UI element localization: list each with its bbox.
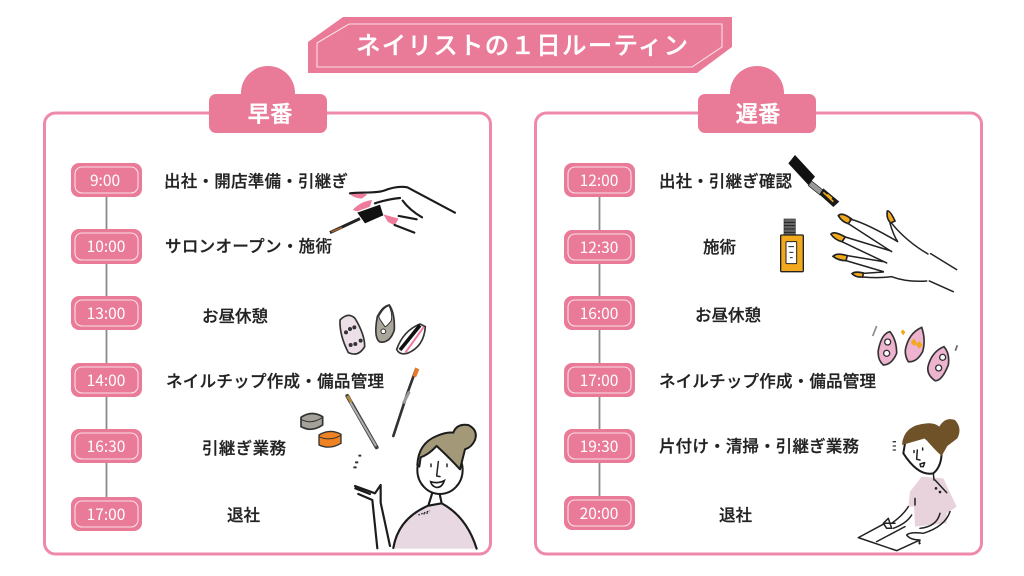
tab: early shift [209, 66, 327, 133]
time 12:30: 12:30 [580, 236, 618, 258]
illustration: woman with bun [355, 425, 477, 549]
timeline: late shift [564, 163, 635, 530]
time 16:00: 16:00 [580, 302, 618, 324]
icon: star nail tips [873, 326, 957, 381]
task labels: late shift: ネイルチップ作成・備品管理 [659, 368, 876, 392]
time 16:00 [564, 296, 635, 330]
illustration: woman writing [858, 419, 960, 551]
task labels: late shift: 退社 [719, 502, 752, 526]
icon: decorated nail tips [340, 305, 425, 354]
task labels: early shift: 出社・開店準備・引継ぎ [164, 168, 348, 192]
time 20:00: 20:00 [580, 502, 618, 524]
time 17:00 [71, 497, 142, 531]
time 16:30: 16:30 [87, 435, 125, 457]
time 14:00 [71, 363, 142, 397]
title banner [308, 17, 732, 73]
time 19:30 [564, 429, 635, 463]
time 17:00 [564, 363, 635, 397]
tab: early shift: 早番 [247, 97, 293, 129]
icon: gel jars [301, 413, 341, 447]
icon: hand holding pink polish brush [330, 187, 455, 233]
icon: yellow polish bottle [781, 219, 803, 272]
task labels: early shift: 引継ぎ業務 [202, 435, 286, 459]
time 12:00: 12:00 [580, 169, 618, 191]
title banner: ネイリストの１日ルーティン [356, 27, 688, 62]
time 16:30 [71, 429, 142, 463]
icon: hand with yellow nails [831, 211, 957, 292]
task labels: early shift: 退社 [227, 502, 260, 526]
task labels: late shift: 片付け・清掃・引継ぎ業務 [659, 433, 860, 457]
time 9:00: 9:00 [90, 169, 120, 191]
task labels: late shift: 施術 [703, 234, 736, 258]
task labels: early shift [164, 168, 384, 526]
time 12:00 [564, 163, 635, 197]
icon: nail brushes [347, 367, 419, 447]
icon: black polish brush [788, 155, 839, 207]
panel: late shift [536, 66, 982, 554]
time 13:00: 13:00 [87, 302, 125, 324]
time 19:30: 19:30 [580, 435, 618, 457]
timeline: early shift [71, 163, 142, 531]
time 12:30 [564, 230, 635, 264]
time 10:00 [71, 229, 142, 264]
time 14:00: 14:00 [87, 369, 125, 391]
panel: early shift [44, 66, 490, 554]
time 9:00 [71, 163, 142, 197]
tab: late shift [698, 66, 816, 133]
time 10:00: 10:00 [87, 235, 125, 257]
time 17:00: 17:00 [87, 503, 125, 525]
tab: late shift: 遅番 [735, 97, 781, 129]
task labels: late shift: 出社・引継ぎ確認 [659, 168, 792, 192]
task labels: early shift: お昼休憩 [202, 303, 268, 327]
time 20:00 [564, 496, 635, 530]
time 17:00: 17:00 [580, 369, 618, 391]
task labels: early shift: ネイルチップ作成・備品管理 [166, 368, 384, 392]
task labels: late shift: お昼休憩 [695, 302, 761, 326]
task labels: early shift: サロンオープン・施術 [165, 233, 332, 257]
icon: sparkle dots [353, 455, 361, 468]
time 13:00 [71, 296, 142, 330]
task labels: late shift [659, 168, 876, 526]
